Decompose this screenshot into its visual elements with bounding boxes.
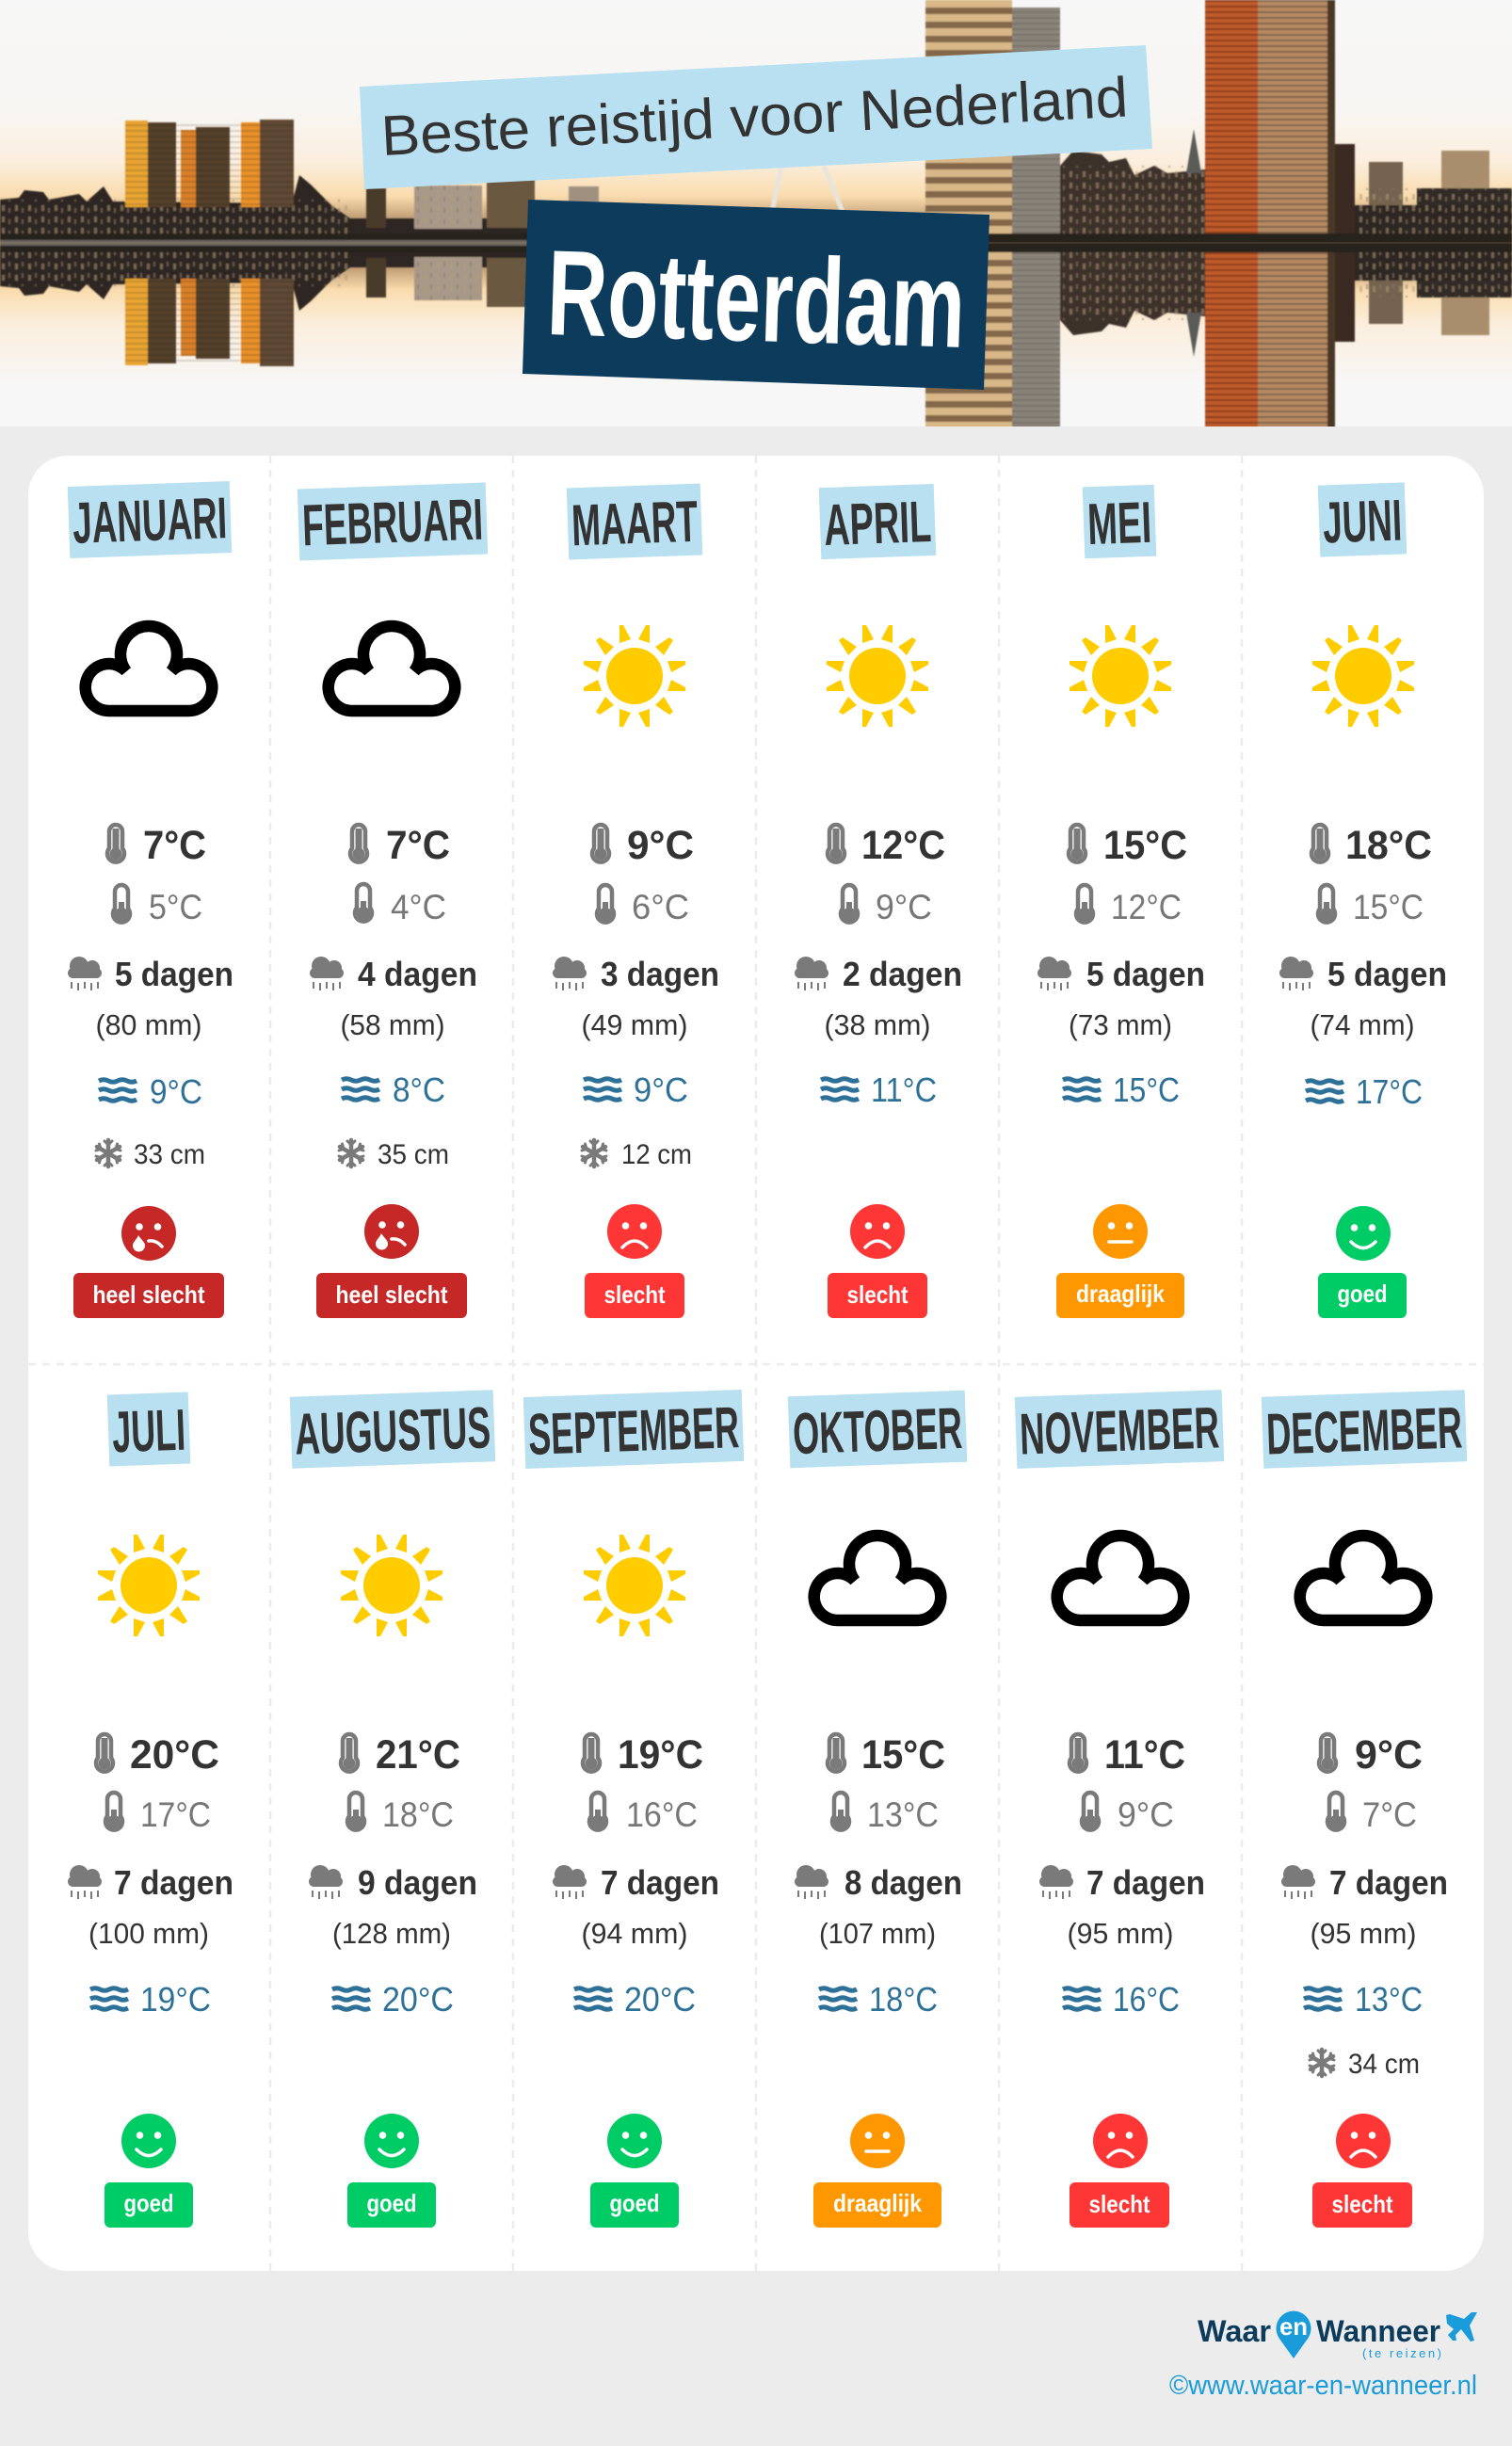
month column: april	[795, 484, 962, 1318]
panel: months card	[28, 456, 1484, 2271]
month label: MAART	[571, 490, 699, 558]
min temperature: 9°C	[1118, 1795, 1174, 1834]
month label	[290, 1390, 495, 1469]
rating badge	[1070, 2182, 1169, 2228]
weather icon: cloud	[86, 626, 212, 711]
icon: rain	[553, 957, 587, 990]
icon: rating face	[850, 2114, 905, 2168]
rain days: 7 dagen	[1086, 1863, 1205, 1902]
rating badge	[828, 1273, 927, 1318]
copyright url: ©www.waar-en-wanneer.nl	[1169, 2371, 1477, 2401]
logo pin	[1277, 2311, 1311, 2358]
rating badge: slecht	[1331, 2190, 1393, 2218]
icon: airplane	[1446, 2312, 1477, 2341]
icon: min thermometer	[841, 885, 858, 923]
water temperature: 20°C	[624, 1980, 696, 2019]
icon: rating face	[364, 2114, 419, 2168]
month label	[523, 1390, 744, 1469]
water temperature: 18°C	[869, 1980, 938, 2019]
snow depth: 12 cm	[621, 1139, 692, 1170]
rating badge	[347, 2182, 436, 2228]
rating badge: slecht	[604, 1280, 666, 1309]
max temperature: 20°C	[130, 1732, 219, 1778]
icon: rain	[553, 1865, 587, 1899]
icon: rating face	[850, 1204, 905, 1259]
rain days: 5 dagen	[1086, 955, 1205, 993]
month label	[819, 484, 936, 559]
icon: rain	[795, 957, 828, 990]
icon: rain	[1279, 957, 1313, 990]
rain days: 7 dagen	[1329, 1863, 1448, 1902]
rating badge: slecht	[1088, 2190, 1150, 2218]
icon: water	[584, 1079, 621, 1100]
month column: februari	[298, 483, 488, 1318]
water temperature: 15°C	[1113, 1070, 1180, 1109]
logo word: Waar: Waar	[1198, 2314, 1271, 2348]
weather icon: sun	[1070, 625, 1171, 727]
icon: max thermometer	[96, 1734, 113, 1772]
icon: rain	[1281, 1865, 1315, 1899]
rating badge	[1056, 1273, 1184, 1318]
icon: min thermometer	[1318, 885, 1335, 923]
icon: rating face	[1093, 1204, 1148, 1259]
icon: min thermometer	[105, 1793, 122, 1830]
rain days: 8 dagen	[844, 1863, 962, 1902]
icon: rain	[309, 1865, 343, 1899]
snow depth: 34 cm	[1348, 2049, 1420, 2080]
rain days: 7 dagen	[114, 1863, 233, 1902]
month label: APRIL	[823, 490, 932, 558]
logo pin: en	[1279, 2312, 1308, 2341]
rating badge: goed	[124, 2189, 173, 2217]
logo: Waar en Wanneer	[1198, 2311, 1477, 2360]
min temperature: 16°C	[626, 1795, 698, 1834]
icon: min thermometer	[1076, 885, 1093, 923]
icon: max thermometer	[583, 1734, 600, 1772]
rain days: 7 dagen	[601, 1863, 719, 1902]
rainfall: (58 mm)	[341, 1008, 444, 1041]
rating badge: heel slecht	[92, 1280, 205, 1309]
rating badge	[1318, 1273, 1407, 1318]
city banner: Rotterdam	[523, 200, 989, 390]
icon: rating face	[1093, 2114, 1148, 2168]
icon: max thermometer	[828, 1734, 844, 1772]
water temperature: 9°C	[634, 1070, 688, 1109]
title banner: Beste reistijd voor Nederland	[360, 45, 1152, 189]
rainfall: (128 mm)	[332, 1917, 451, 1950]
month column: december	[1262, 1390, 1467, 2228]
water temperature: 9°C	[150, 1072, 202, 1111]
weather icon: sun	[584, 1535, 685, 1636]
water temperature: 8°C	[393, 1070, 445, 1109]
month label: JUNI	[1322, 489, 1403, 555]
icon: water	[90, 1988, 128, 2009]
rainfall: (49 mm)	[582, 1008, 687, 1041]
min temperature: 7°C	[1362, 1795, 1417, 1834]
month label	[1015, 1390, 1224, 1469]
icon: water	[1063, 1988, 1101, 2009]
icon: rain	[310, 957, 344, 990]
icon: max thermometer	[350, 825, 367, 862]
weather icon: cloud	[329, 626, 455, 711]
icon: max thermometer	[592, 825, 609, 862]
max temperature: 15°C	[861, 1732, 945, 1778]
max temperature: 11°C	[1104, 1732, 1185, 1778]
icon: rating face	[1336, 2114, 1391, 2168]
rating badge	[1312, 2182, 1412, 2228]
month label	[788, 1391, 967, 1468]
month label: FEBRUARI	[301, 488, 484, 558]
snow depth: 35 cm	[378, 1139, 449, 1170]
rating badge	[585, 1273, 684, 1318]
month label	[1083, 485, 1156, 558]
icon: max thermometer	[107, 825, 124, 862]
icon: rain	[68, 1865, 102, 1899]
weather icon: sun	[584, 625, 685, 727]
month column: januari	[68, 481, 233, 1318]
max temperature: 9°C	[627, 823, 694, 868]
month column: september	[523, 1390, 744, 2228]
weather icon: sun	[827, 625, 928, 727]
rainfall: (74 mm)	[1311, 1008, 1414, 1041]
month column: oktober	[788, 1391, 967, 2228]
icon: rating face	[121, 1206, 176, 1261]
snow depth: 33 cm	[134, 1139, 205, 1170]
rain days: 4 dagen	[358, 955, 477, 993]
icon: snow	[1310, 2050, 1334, 2076]
water temperature: 20°C	[382, 1980, 454, 2019]
icon: max thermometer	[1069, 825, 1086, 862]
icon: water	[1063, 1079, 1101, 1100]
city banner: Rotterdam: Rotterdam	[545, 225, 967, 374]
weather icon: cloud	[1057, 1536, 1183, 1620]
month label	[567, 484, 702, 559]
icon: rain	[68, 957, 102, 990]
rating badge: draaglijk	[833, 2189, 922, 2217]
icon: rain	[1039, 1865, 1073, 1899]
icon: min thermometer	[347, 1793, 364, 1830]
rain days: 5 dagen	[115, 955, 233, 993]
icon: water	[1306, 1081, 1343, 1102]
rain days: 3 dagen	[601, 955, 719, 993]
month column: juli	[68, 1392, 233, 2228]
rating badge: goed	[1337, 1279, 1388, 1308]
max temperature: 7°C	[386, 823, 450, 868]
month label	[68, 481, 232, 558]
min temperature: 17°C	[140, 1795, 211, 1834]
icon: water	[819, 1988, 857, 2009]
icon: max thermometer	[341, 1734, 358, 1772]
min temperature: 18°C	[382, 1795, 454, 1834]
month label: OKTOBER	[792, 1396, 963, 1467]
title banner: Beste reistijd voor Nederland: Beste reistijd voor Nederland	[379, 66, 1130, 168]
month label	[107, 1392, 190, 1466]
icon: water	[1304, 1988, 1342, 2009]
icon: max thermometer	[1070, 1734, 1086, 1772]
min temperature: 9°C	[876, 888, 932, 926]
icon: min thermometer	[1082, 1793, 1099, 1830]
rating badge: draaglijk	[1076, 1279, 1165, 1308]
max temperature: 15°C	[1103, 823, 1187, 868]
icon: rating face	[364, 1204, 419, 1259]
min temperature: 12°C	[1111, 888, 1182, 926]
max temperature: 18°C	[1345, 823, 1432, 868]
min temperature: 4°C	[391, 888, 446, 926]
icon: snow	[339, 1140, 363, 1167]
rainfall: (107 mm)	[819, 1917, 936, 1950]
rainfall: (73 mm)	[1069, 1008, 1172, 1041]
rating badge	[105, 2182, 193, 2228]
month label	[1318, 482, 1407, 557]
month label: NOVEMBER	[1019, 1395, 1220, 1468]
rating badge	[73, 1273, 224, 1318]
icon: rating face	[1336, 1206, 1391, 1261]
icon: water	[342, 1079, 379, 1100]
water temperature: 11°C	[871, 1070, 937, 1109]
icon: water	[99, 1080, 137, 1101]
max temperature: 12°C	[861, 823, 945, 868]
min temperature: 15°C	[1353, 888, 1424, 926]
icon: min thermometer	[597, 885, 614, 923]
month label	[298, 483, 488, 560]
rating badge	[813, 2182, 941, 2228]
rainfall: (100 mm)	[88, 1917, 209, 1950]
icon: max thermometer	[828, 825, 844, 862]
icon: min thermometer	[355, 884, 372, 922]
rating badge	[316, 1273, 467, 1318]
icon: min thermometer	[832, 1793, 849, 1830]
icon: water	[332, 1988, 370, 2009]
icon: min thermometer	[1327, 1793, 1344, 1830]
month column: mei	[1037, 485, 1205, 1318]
weather icon: cloud	[1300, 1536, 1426, 1620]
month column: augustus	[290, 1390, 495, 2228]
rating badge: heel slecht	[335, 1280, 448, 1309]
icon: snow	[96, 1140, 121, 1167]
icon: min thermometer	[589, 1793, 606, 1830]
icon: rain	[795, 1865, 828, 1899]
water temperature: 19°C	[140, 1980, 211, 2019]
max temperature: 19°C	[618, 1732, 703, 1778]
max temperature: 21°C	[376, 1732, 460, 1778]
icon: water	[821, 1079, 859, 1100]
rainfall: (38 mm)	[825, 1008, 930, 1041]
rainfall: (95 mm)	[1311, 1917, 1416, 1950]
icon: rain	[1037, 957, 1071, 990]
rain days: 5 dagen	[1327, 955, 1447, 993]
weather icon: sun	[1312, 625, 1414, 727]
month column: juni	[1279, 482, 1447, 1318]
icon: water	[574, 1988, 612, 2009]
weather icon: sun	[341, 1535, 442, 1636]
icon: min thermometer	[113, 885, 130, 923]
month label: SEPTEMBER	[527, 1395, 740, 1468]
icon: snow	[582, 1140, 606, 1167]
icon: rating face	[121, 2114, 176, 2168]
min temperature: 6°C	[632, 888, 689, 926]
water temperature: 13°C	[1355, 1980, 1423, 2019]
rainfall: (80 mm)	[96, 1008, 201, 1041]
rating badge: goed	[367, 2189, 416, 2217]
min temperature: 13°C	[867, 1795, 939, 1834]
header photo: Rotterdam skyline with reflection	[0, 0, 1512, 426]
icon: rating face	[607, 2114, 662, 2168]
month label: JANUARI	[72, 486, 228, 556]
weather icon: sun	[98, 1535, 200, 1636]
logo word: Wanneer: Wanneer	[1316, 2314, 1440, 2348]
logo tagline: (te reizen)	[1362, 2346, 1441, 2360]
month label: AUGUSTUS	[294, 1395, 491, 1468]
rain days: 9 dagen	[358, 1863, 477, 1902]
rating badge	[590, 2182, 679, 2228]
max temperature: 7°C	[143, 823, 206, 868]
month label: MEI	[1086, 491, 1152, 557]
max temperature: 9°C	[1355, 1732, 1423, 1778]
water temperature: 17°C	[1356, 1072, 1423, 1111]
min temperature: 5°C	[149, 888, 202, 926]
water temperature: 16°C	[1113, 1980, 1180, 2019]
icon: max thermometer	[1311, 825, 1328, 862]
rainfall: (95 mm)	[1068, 1917, 1173, 1950]
weather icon: cloud	[814, 1536, 941, 1620]
rain days: 2 dagen	[843, 955, 962, 993]
rating badge: slecht	[847, 1280, 909, 1309]
month column: maart	[553, 484, 719, 1318]
icon: rating face	[607, 1204, 662, 1259]
rating badge: goed	[610, 2189, 659, 2217]
icon: max thermometer	[1319, 1734, 1336, 1772]
month column: november	[1015, 1390, 1224, 2228]
rainfall: (94 mm)	[582, 1917, 687, 1950]
month label: JULI	[111, 1398, 186, 1465]
